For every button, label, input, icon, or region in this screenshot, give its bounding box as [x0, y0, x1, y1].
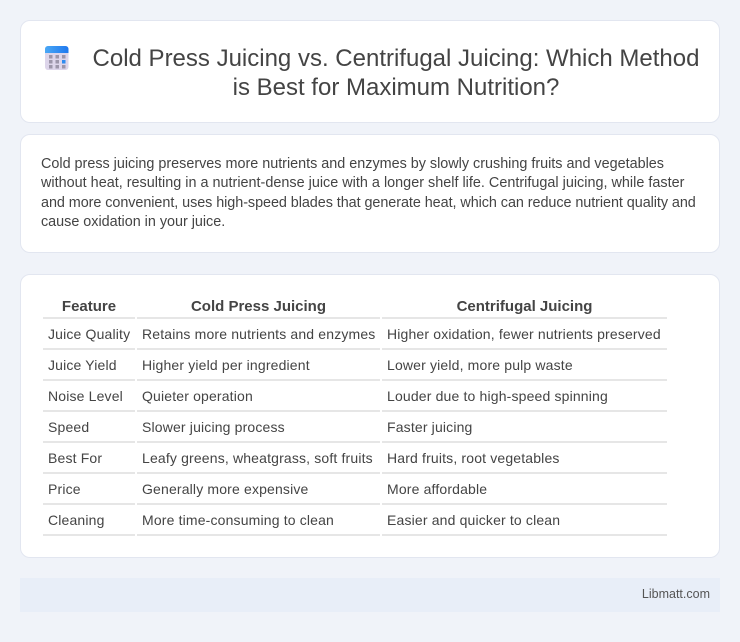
row: cleaning: Cleaning: [48, 512, 105, 528]
row: cleaning: Easier and quicker to clean: [387, 512, 560, 528]
row: cleaning: More time-consuming to clean: [142, 512, 334, 528]
panel: header: [20, 20, 720, 123]
table header: Feature: [62, 298, 116, 315]
icon: calendar: [45, 46, 68, 70]
row: noise level: [48, 388, 608, 404]
intro paragraph: without heat, resulting in a nutrient-dense juice with a longer shelf life. Centrifugal juicing, while faster: [41, 175, 684, 191]
title: Cold Press Juicing vs. Centrifugal Juicing: Which Method is Best for Maximum Nutrition?: [93, 45, 699, 101]
footer credit: Libmatt.com: [642, 587, 710, 601]
row: best for: [48, 450, 560, 466]
row: juice quality: Retains more nutrients and enzymes: [142, 326, 375, 342]
table header: [62, 298, 592, 315]
row: juice yield: [48, 357, 573, 373]
row: juice yield: Lower yield, more pulp waste: [387, 357, 573, 373]
row: price: Generally more expensive: [142, 481, 308, 497]
table header: Centrifugal Juicing: [457, 298, 592, 315]
row: juice yield: Higher yield per ingredient: [142, 357, 310, 373]
row: cleaning: [48, 512, 560, 528]
intro paragraph: Cold press juicing preserves more nutrients and enzymes by slowly crushing fruits and vegetables: [41, 156, 664, 172]
row: juice quality: [48, 326, 661, 342]
panel: comparison table: [20, 274, 720, 558]
footer bar: [20, 578, 720, 612]
row: juice quality: Higher oxidation, fewer nutrients preserved: [387, 326, 661, 342]
row: speed: Speed: [48, 419, 89, 435]
row: noise level: Noise Level: [48, 388, 123, 404]
intro paragraph: cause oxidation in your juice.: [41, 214, 225, 230]
row: noise level: Louder due to high-speed spinning: [387, 388, 608, 404]
comparison table: [43, 298, 667, 536]
intro paragraph: [41, 156, 696, 230]
row: price: More affordable: [387, 481, 487, 497]
intro paragraph: and more convenient, uses high-speed blades that generate heat, which can reduce nutrient quality and: [41, 195, 696, 211]
row: juice yield: Juice Yield: [48, 357, 117, 373]
row: best for: Best For: [48, 450, 102, 466]
panel: intro text: [20, 134, 720, 253]
row: noise level: Quieter operation: [142, 388, 253, 404]
row: price: Price: [48, 481, 81, 497]
row: speed: Faster juicing: [387, 419, 472, 435]
row: price: [48, 481, 487, 497]
row: juice quality: Juice Quality: [48, 326, 130, 342]
row: speed: [48, 419, 472, 435]
row: best for: Leafy greens, wheatgrass, soft fruits: [142, 450, 373, 466]
row: best for: Hard fruits, root vegetables: [387, 450, 560, 466]
row: speed: Slower juicing process: [142, 419, 285, 435]
table header: Cold Press Juicing: [191, 298, 326, 315]
